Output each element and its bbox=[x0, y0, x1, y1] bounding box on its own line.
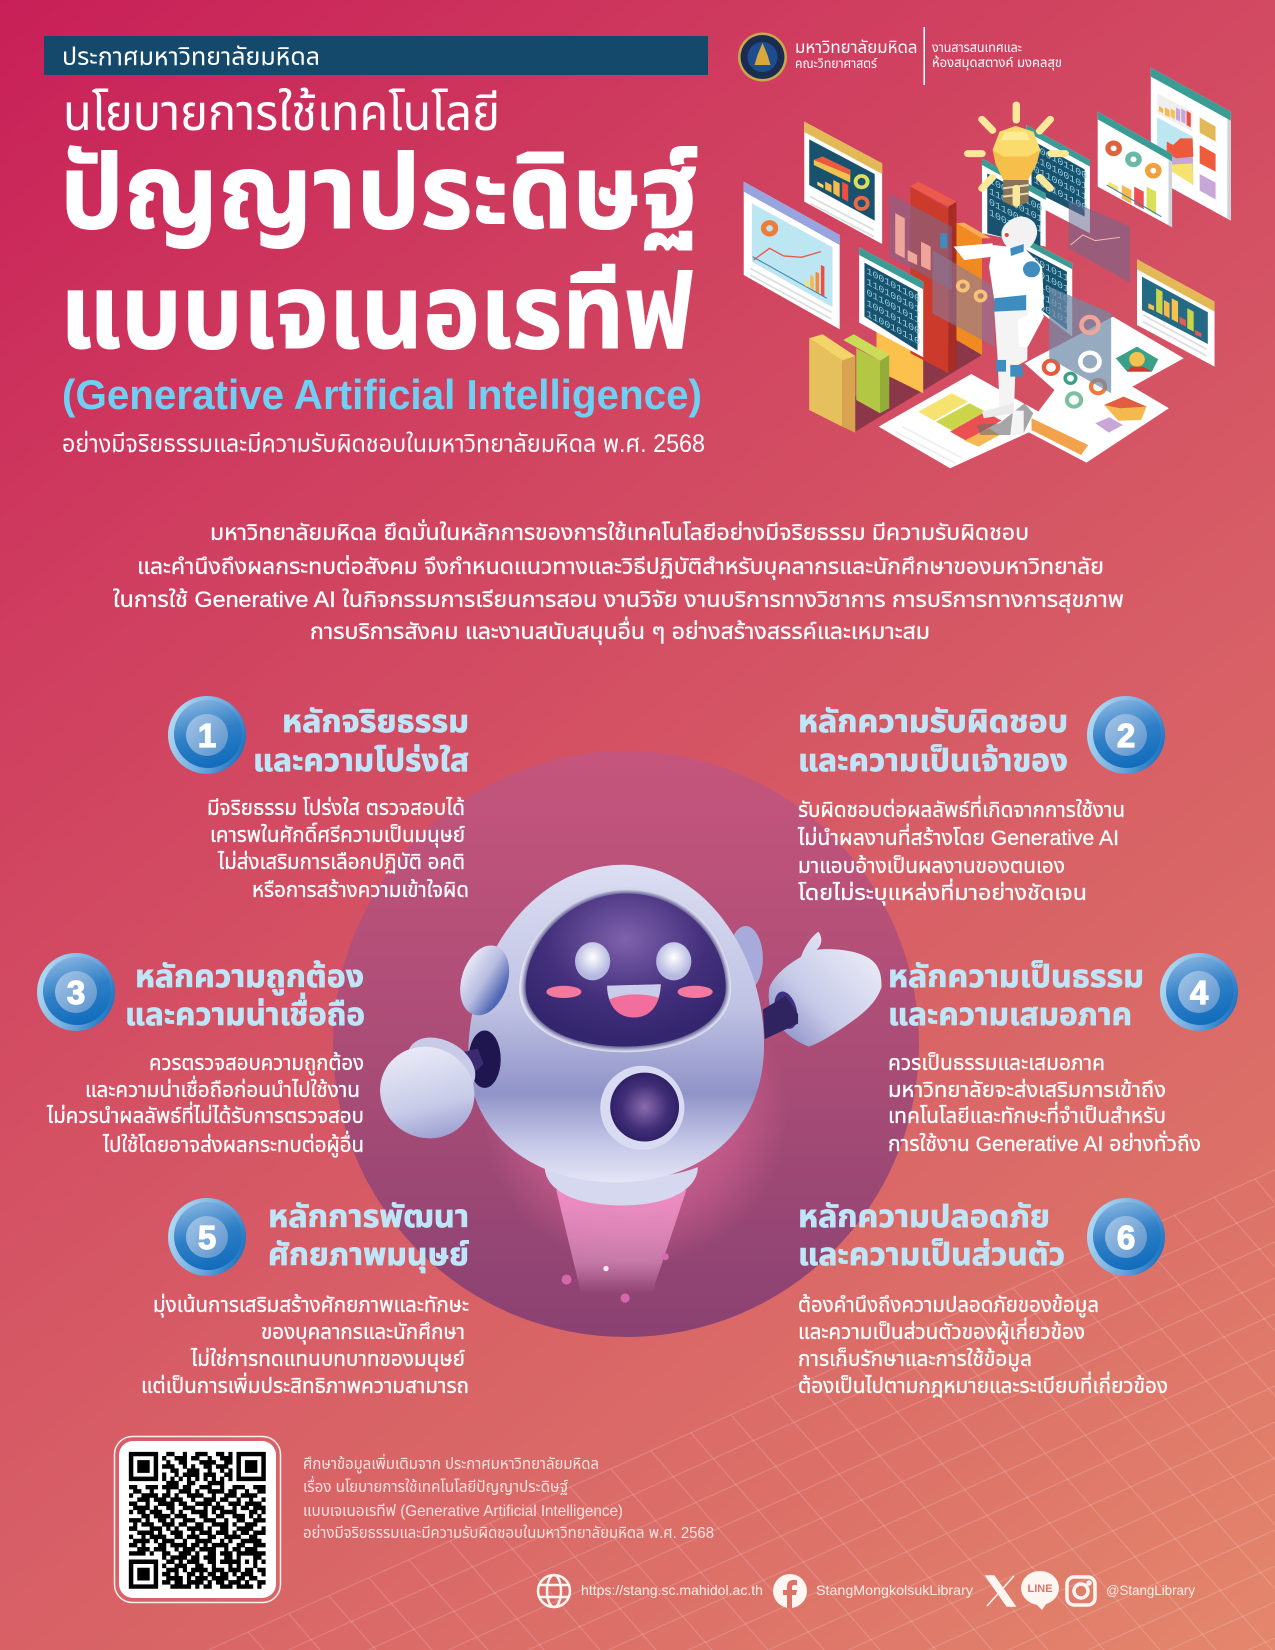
principle 5: ของบุคลากรและนักศึกษา bbox=[261, 1321, 465, 1345]
window: upper left dashboard bbox=[804, 122, 882, 244]
principle 4: ควรเป็นธรรมและเสมอภาค bbox=[888, 1052, 1105, 1075]
principle 6: และความเป็นส่วนตัวของผู้เกี่ยวข้อง bbox=[798, 1317, 1085, 1345]
window: bottom left binary: 100101100 bbox=[867, 298, 920, 338]
principle 1: เคารพในศักดิ์ศรีความเป็นมนุษย์ bbox=[210, 822, 465, 848]
principle 6: และความเป็นส่วนตัว bbox=[798, 1237, 1065, 1272]
icon: globe bbox=[538, 1575, 570, 1607]
title bbox=[60, 85, 705, 458]
badge 2 bbox=[1087, 696, 1165, 774]
principle 1: หรือการสร้างความเข้าใจผิด bbox=[252, 878, 469, 902]
principle 3: และความน่าเชื่อถือ bbox=[125, 992, 365, 1032]
window: right binary: 0110010 bbox=[1027, 273, 1069, 307]
badge 1: 1 bbox=[198, 717, 216, 754]
source note: อย่างมีจริยธรรมและมีความรับผิดชอบในมหาวิทยาลัยมหิดล พ.ศ. 2568 bbox=[303, 1524, 714, 1542]
header banner bbox=[44, 36, 708, 75]
badge 5: 5 bbox=[198, 1219, 216, 1256]
logo block: งานสารสนเทศและ bbox=[932, 40, 1022, 55]
window: binary behind bulb: 110100101 bbox=[1034, 153, 1087, 193]
intro paragraph: ในการใช้ Generative AI ในกิจกรรมการเรียนการสอน งานวิจัย งานบริการทางวิชาการ การบริการทางการสุขภาพ bbox=[113, 587, 1124, 613]
principle 3 bbox=[37, 953, 365, 1158]
principle 5: แต่เป็นการเพิ่มประสิทธิภาพความสามารถ bbox=[141, 1372, 469, 1398]
footer contact row: https://stang.sc.mahidol.ac.th bbox=[581, 1582, 763, 1598]
window: upper right charts bbox=[1098, 112, 1172, 227]
illustration: isometric robot with dashboards bbox=[744, 68, 1231, 468]
window: right binary: 1101001 bbox=[1027, 263, 1069, 296]
eyes, cheeks, mouth bbox=[546, 942, 713, 1018]
principle 6: ต้องเป็นไปตามกฎหมายและระเบียบที่เกี่ยวข้อง bbox=[798, 1371, 1168, 1398]
principle 3: ไม่ควรนำผลลัพธ์ที่ไม่ได้รับการตรวจสอบ bbox=[46, 1101, 364, 1128]
mascot robot bbox=[363, 865, 882, 1303]
icon: instagram bbox=[1067, 1577, 1095, 1605]
logo block: ห้องสมุดสตางค์ มงคลสุข bbox=[932, 55, 1062, 70]
badge 4 bbox=[1160, 953, 1238, 1031]
face screen bbox=[519, 889, 731, 1052]
principle 3: ไปใช้โดยอาจส่งผลกระทบต่อผู้อื่น bbox=[102, 1130, 364, 1158]
principle 5: มุ่งเน้นการเสริมสร้างศักยภาพและทักษะ bbox=[153, 1293, 469, 1318]
intro paragraph: และคำนึงถึงผลกระทบต่อสังคม จึงกำหนดแนวทางและวิธีปฏิบัติสำหรับบุคลากรและนักศึกษาของมหาวิทยาลัย bbox=[137, 554, 1104, 580]
badge 3 bbox=[37, 953, 115, 1031]
logo block: คณะวิทยาศาสตร์ bbox=[795, 56, 878, 71]
title: อย่างมีจริยธรรมและมีความรับผิดชอบในมหาวิทยาลัยมหิดล พ.ศ. 2568 bbox=[62, 430, 705, 458]
window: right dashboard bbox=[1137, 259, 1215, 367]
window: centre binary: 1001011 bbox=[989, 207, 1031, 241]
chest port bbox=[600, 1066, 684, 1150]
window: right binary: 1001011 bbox=[1027, 284, 1069, 318]
title: (Generative Artificial Intelligence) bbox=[62, 371, 702, 418]
principle 3: หลักความถูกต้อง bbox=[135, 959, 364, 995]
robot figure bbox=[940, 217, 1044, 435]
source note: ศึกษาข้อมูลเพิ่มเติมจาก ประกาศมหาวิทยาลัยมหิดล bbox=[303, 1453, 599, 1473]
principle 4: การใช้งาน Generative AI อย่างทั่วถึง bbox=[888, 1130, 1201, 1156]
principle 2 bbox=[797, 696, 1165, 906]
principle 2: หลักความรับผิดชอบ bbox=[798, 704, 1068, 739]
window: bottom left binary: 110010110 bbox=[867, 309, 920, 349]
badge 5 bbox=[168, 1198, 246, 1276]
QR code bbox=[114, 1436, 280, 1602]
window: right binary: 1100101 bbox=[1027, 295, 1069, 328]
principle 3: ควรตรวจสอบความถูกต้อง bbox=[149, 1051, 364, 1076]
title: ปัญญาประดิษฐ์ bbox=[60, 135, 698, 251]
window: bottom left binary: 011001011 bbox=[867, 287, 920, 327]
window: left chart bbox=[744, 182, 840, 329]
title: แบบเจเนอเรทีฟ bbox=[60, 255, 693, 371]
window: bottom left binary: 100101100 bbox=[867, 266, 920, 306]
right ear bbox=[728, 926, 763, 991]
window: right binary: 1001011 bbox=[1027, 252, 1069, 286]
floor shadow bbox=[855, 340, 982, 432]
principle 4: และความเสมอภาค bbox=[888, 997, 1132, 1032]
floor paper sheets bbox=[879, 317, 1184, 468]
window: centre binary bbox=[982, 158, 1046, 247]
window: right binary bbox=[1024, 238, 1072, 337]
left arm and hand bbox=[363, 1026, 501, 1156]
principle 4 bbox=[888, 953, 1238, 1156]
source note: แบบเจเนอเรทีฟ (Generative Artificial Intelligence) bbox=[303, 1503, 623, 1520]
intro paragraph: มหาวิทยาลัยมหิดล ยึดมั่นในหลักการของการใช้เทคโนโลยีอย่างมีจริยธรรม มีความรับผิดชอบ bbox=[210, 518, 1029, 545]
principle 2: โดยไม่ระบุแหล่งที่มาอย่างชัดเจน bbox=[798, 878, 1087, 906]
logo block: มหาวิทยาลัยมหิดล bbox=[795, 38, 918, 57]
window: centre binary: 100101100 bbox=[989, 175, 1043, 215]
principle 5: หลักการพัฒนา bbox=[268, 1199, 469, 1234]
lightbulb bbox=[968, 105, 1065, 207]
principle 2: ไม่นำผลงานที่สร้างโดย Generative AI bbox=[797, 823, 1119, 850]
window: binary behind bulb: 011001011 bbox=[1034, 164, 1087, 204]
logo block bbox=[738, 27, 1062, 85]
intro paragraph: การบริการสังคม และงานสนับสนุนอื่น ๆ อย่างสร้างสรรค์และเหมาะสม bbox=[310, 616, 930, 645]
source note bbox=[303, 1453, 714, 1542]
principle 1 bbox=[168, 696, 469, 902]
principle 5: ศักยภาพมนุษย์ bbox=[268, 1237, 469, 1273]
footer contact row: StangMongkolsukLibrary bbox=[816, 1582, 973, 1598]
principle 2: มาแอบอ้างเป็นผลงานของตนเอง bbox=[798, 854, 1065, 878]
icon: LINE bbox=[1021, 1571, 1059, 1610]
badge 6: 6 bbox=[1117, 1219, 1135, 1256]
principle 1: ไม่ส่งเสริมการเลือกปฏิบัติ อคติ bbox=[217, 850, 465, 874]
badge 3: 3 bbox=[67, 974, 85, 1011]
icon: X bbox=[986, 1576, 1015, 1606]
principle 4: เทคโนโลยีและทักษะที่จำเป็นสำหรับ bbox=[888, 1101, 1166, 1128]
source note: เรื่อง นโยบายการใช้เทคโนโลยีปัญญาประดิษฐ์ bbox=[303, 1475, 568, 1496]
principle 6: การเก็บรักษาและการใช้ข้อมูล bbox=[798, 1346, 1032, 1372]
right hand and arm bbox=[763, 932, 882, 1047]
window: binary behind bulb: 100101100 bbox=[1034, 175, 1087, 215]
icon: facebook bbox=[773, 1574, 807, 1608]
left ear bbox=[452, 939, 518, 1022]
principle 2: รับผิดชอบต่อผลลัพธ์ที่เกิดจากการใช้งาน bbox=[798, 795, 1125, 822]
principle 3: และความน่าเชื่อถือก่อนนำไปใช้งาน bbox=[85, 1075, 360, 1102]
thruster beams bbox=[556, 1190, 686, 1303]
intro paragraph bbox=[113, 518, 1124, 645]
principle 6: ต้องคำนึงถึงความปลอดภัยของข้อมูล bbox=[798, 1293, 1099, 1318]
window: binary behind bulb: 100101100 bbox=[1034, 143, 1087, 183]
robot body bbox=[468, 865, 764, 1182]
window: centre binary: 011001011 bbox=[989, 197, 1043, 237]
window: top right bbox=[1151, 68, 1231, 221]
robot base bbox=[545, 1167, 698, 1205]
principle 6: หลักความปลอดภัย bbox=[798, 1199, 1050, 1234]
principle 1: หลักจริยธรรม bbox=[282, 704, 469, 739]
title: นโยบายการใช้เทคโนโลยี bbox=[63, 85, 500, 141]
principle 1: มีจริยธรรม โปร่งใส ตรวจสอบได้ bbox=[207, 796, 465, 820]
header banner: ประกาศมหาวิทยาลัยมหิดล bbox=[62, 43, 320, 71]
principle 1: และความโปร่งใส bbox=[253, 743, 469, 778]
footer contact row bbox=[538, 1571, 1195, 1610]
window: bottom left binary: 110100101 bbox=[867, 277, 920, 317]
window: centre binary: 110100101 bbox=[989, 186, 1043, 226]
icon: LINE: LINE bbox=[1027, 1583, 1053, 1595]
big centre circle bbox=[333, 751, 919, 1337]
principle 6 bbox=[798, 1198, 1168, 1398]
badge 4: 4 bbox=[1190, 974, 1209, 1011]
principle 4: มหาวิทยาลัยจะส่งเสริมการเข้าถึง bbox=[888, 1078, 1166, 1102]
footer contact row: @StangLibrary bbox=[1106, 1582, 1195, 1598]
3D bars bbox=[809, 182, 991, 433]
window: bottom left binary bbox=[859, 247, 923, 357]
principle 5 bbox=[141, 1198, 469, 1398]
principle 2: และความเป็นเจ้าของ bbox=[798, 743, 1068, 778]
window: binary behind bulb bbox=[1026, 125, 1090, 233]
glass panels bbox=[889, 193, 1130, 393]
principle 4: หลักความเป็นธรรม bbox=[888, 959, 1144, 994]
badge 2: 2 bbox=[1117, 717, 1135, 754]
badge 6 bbox=[1087, 1198, 1165, 1276]
badge 1 bbox=[168, 696, 246, 774]
principle 5: ไม่ใช่การทดแทนบทบาทของมนุษย์ bbox=[190, 1347, 465, 1372]
